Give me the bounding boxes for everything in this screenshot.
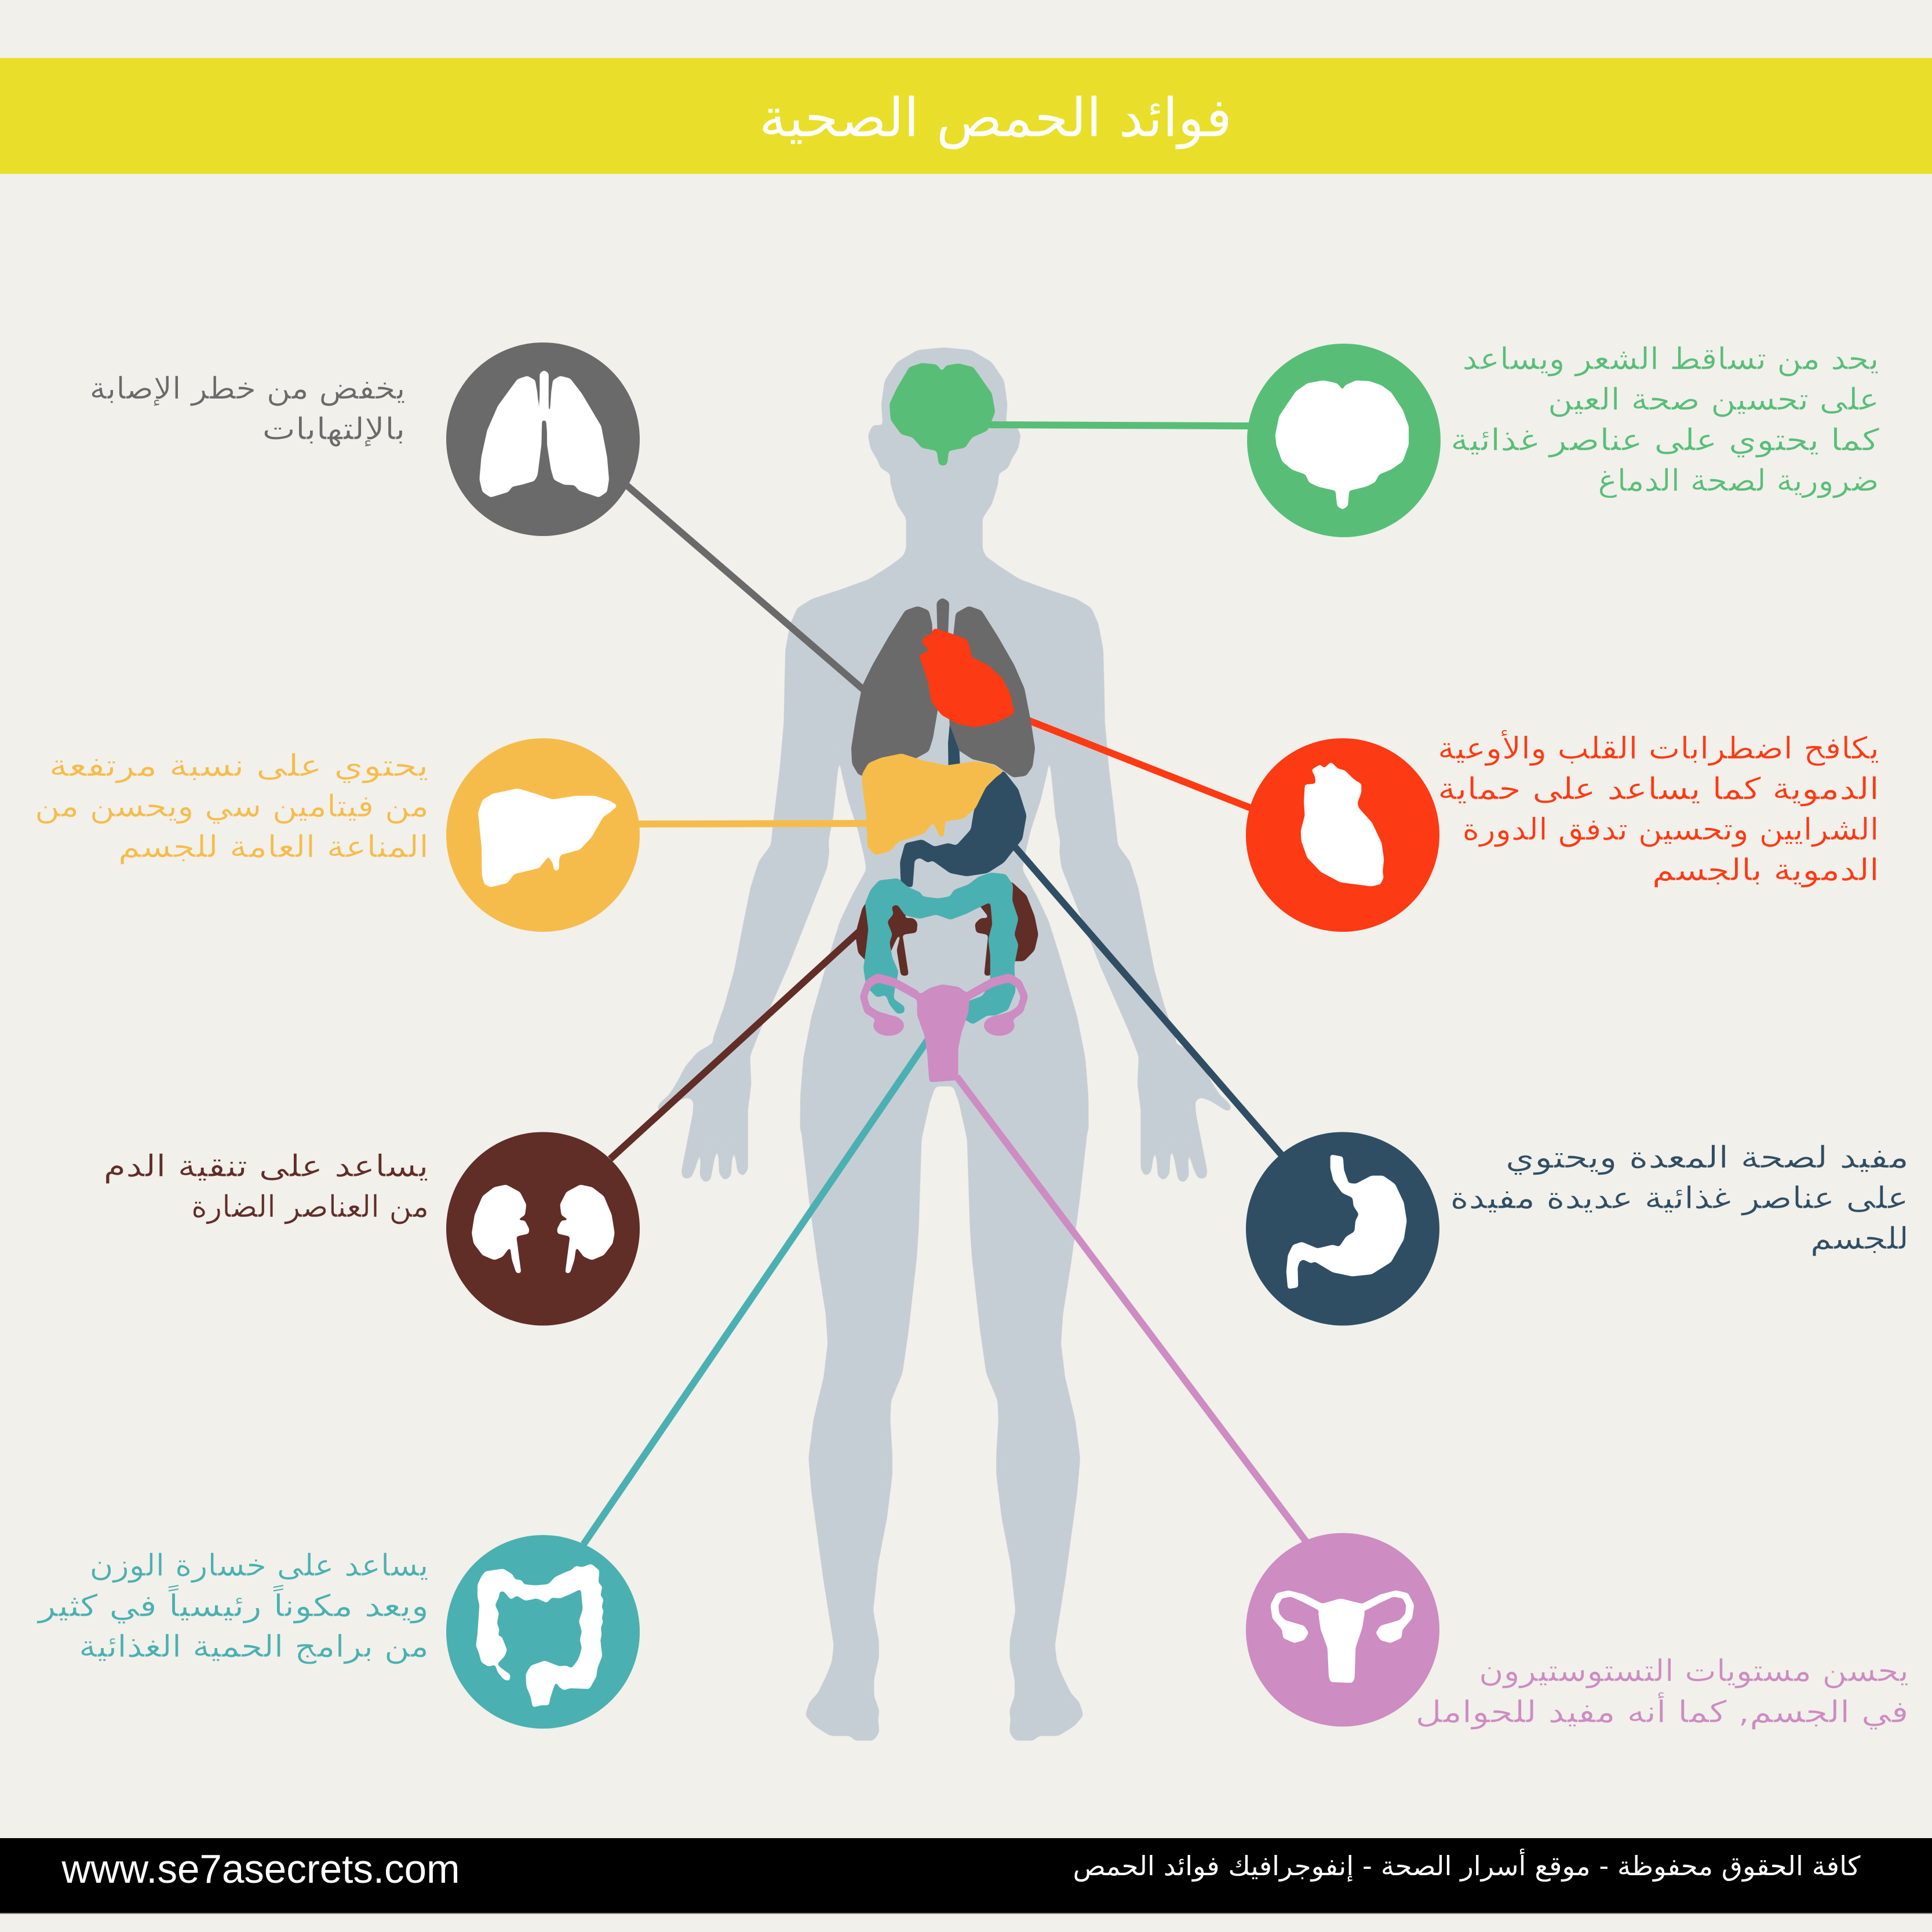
icon: lungs [480, 371, 608, 497]
panel: brain circle [1247, 344, 1441, 537]
icon: intestine [476, 1565, 603, 1707]
icon: heart [1302, 763, 1383, 886]
text: intestine benefit [36, 1548, 429, 1664]
title banner [0, 58, 1932, 174]
footer credits: كافة الحقوق محفوظة - موقع أسرار الصحة - إنفوجرافيك فوائد الحمص [1073, 1849, 1861, 1882]
text: stomach benefit: للجسم [1810, 1222, 1909, 1256]
text: brain benefit: ضرورية لصحة الدماغ [1598, 464, 1879, 498]
text: liver benefit [35, 749, 429, 865]
organ: esophagus [948, 725, 960, 769]
text: liver benefit: المناعة العامة للجسم [118, 830, 429, 865]
panel: liver circle [446, 738, 640, 932]
text: heart benefit: الدموية كما يساعد على حماية [1438, 772, 1879, 807]
text: brain benefit [1450, 342, 1879, 498]
organ: heart [920, 629, 1014, 727]
title: فوائد الحمص الصحية [759, 87, 1232, 150]
icon: brain [1276, 381, 1408, 509]
text: uterus benefit [1415, 1654, 1909, 1730]
human body silhouette [658, 348, 1231, 1740]
organ: lungs [852, 599, 1034, 777]
panel: heart circle [1246, 738, 1439, 932]
icon: uterus [1271, 1591, 1413, 1682]
text: kidney benefit: من العناصر الضارة [191, 1190, 429, 1224]
panel: intestine circle [446, 1535, 640, 1729]
panel: stomach circle [1246, 1132, 1439, 1326]
text: stomach benefit: مفيد لصحة المعدة ويحتوي [1505, 1140, 1909, 1175]
panel: lungs circle [446, 342, 640, 536]
text: lungs benefit: يخفض من خطر الإصابة [89, 371, 406, 406]
icon: stomach [1287, 1155, 1406, 1288]
organ: uterus [863, 978, 1025, 1081]
organ: kidneys [856, 883, 1037, 975]
panel: kidneys circle [446, 1132, 640, 1326]
connector lines [584, 425, 1307, 1544]
text: brain benefit: على تحسين صحة العين [1548, 382, 1879, 417]
icon: liver [479, 789, 617, 887]
text: kidney benefit: يساعد على تنقية الدم [103, 1149, 429, 1184]
text: stomach benefit: على عناصر غذائية عديدة مفيدة [1450, 1181, 1909, 1216]
footer website: www.se7asecrets.com [61, 1846, 460, 1891]
text: heart benefit: الدموية بالجسم [1652, 853, 1879, 888]
panel: uterus circle [1246, 1533, 1439, 1727]
text: brain benefit: كما يحتوي على عناصر غذائية [1450, 423, 1879, 458]
text: liver benefit: يحتوي على نسبة مرتفعة [49, 749, 429, 783]
text: heart benefit [1438, 730, 1879, 888]
text: stomach benefit [1450, 1140, 1909, 1256]
text: intestine benefit: يساعد على خسارة الوزن [89, 1548, 429, 1583]
footer bar [0, 1838, 1932, 1914]
organ: liver [863, 754, 1003, 854]
icon: kidneys [472, 1185, 614, 1273]
text: uterus benefit: يحسن مستويات التستوستيرون [1479, 1654, 1909, 1689]
organ: intestine [864, 873, 1018, 1023]
organ: stomach [901, 771, 1026, 887]
text: lungs benefit: بالإلتهابات [262, 412, 406, 447]
organs inside the body [852, 364, 1037, 1081]
text: uterus benefit: في الجسم, كما أنه مفيد للحوامل [1415, 1692, 1909, 1730]
text: brain benefit: يحد من تساقط الشعر ويساعد [1463, 342, 1879, 377]
text: intestine benefit: ويعد مكوناً رئيسياً في كثير [36, 1585, 429, 1624]
text: intestine benefit: من برامج الحمية الغذائية [79, 1630, 429, 1664]
text: heart benefit: يكافح اضطرابات القلب والأوعية [1438, 730, 1879, 766]
text: lungs benefit [89, 371, 406, 447]
text: liver benefit: من فيتامين سي ويحسن من [35, 789, 429, 824]
text: heart benefit: الشرايين وتحسين تدفق الدورة [1463, 812, 1879, 847]
organ: brain [890, 364, 994, 465]
text: kidney benefit [103, 1149, 429, 1224]
